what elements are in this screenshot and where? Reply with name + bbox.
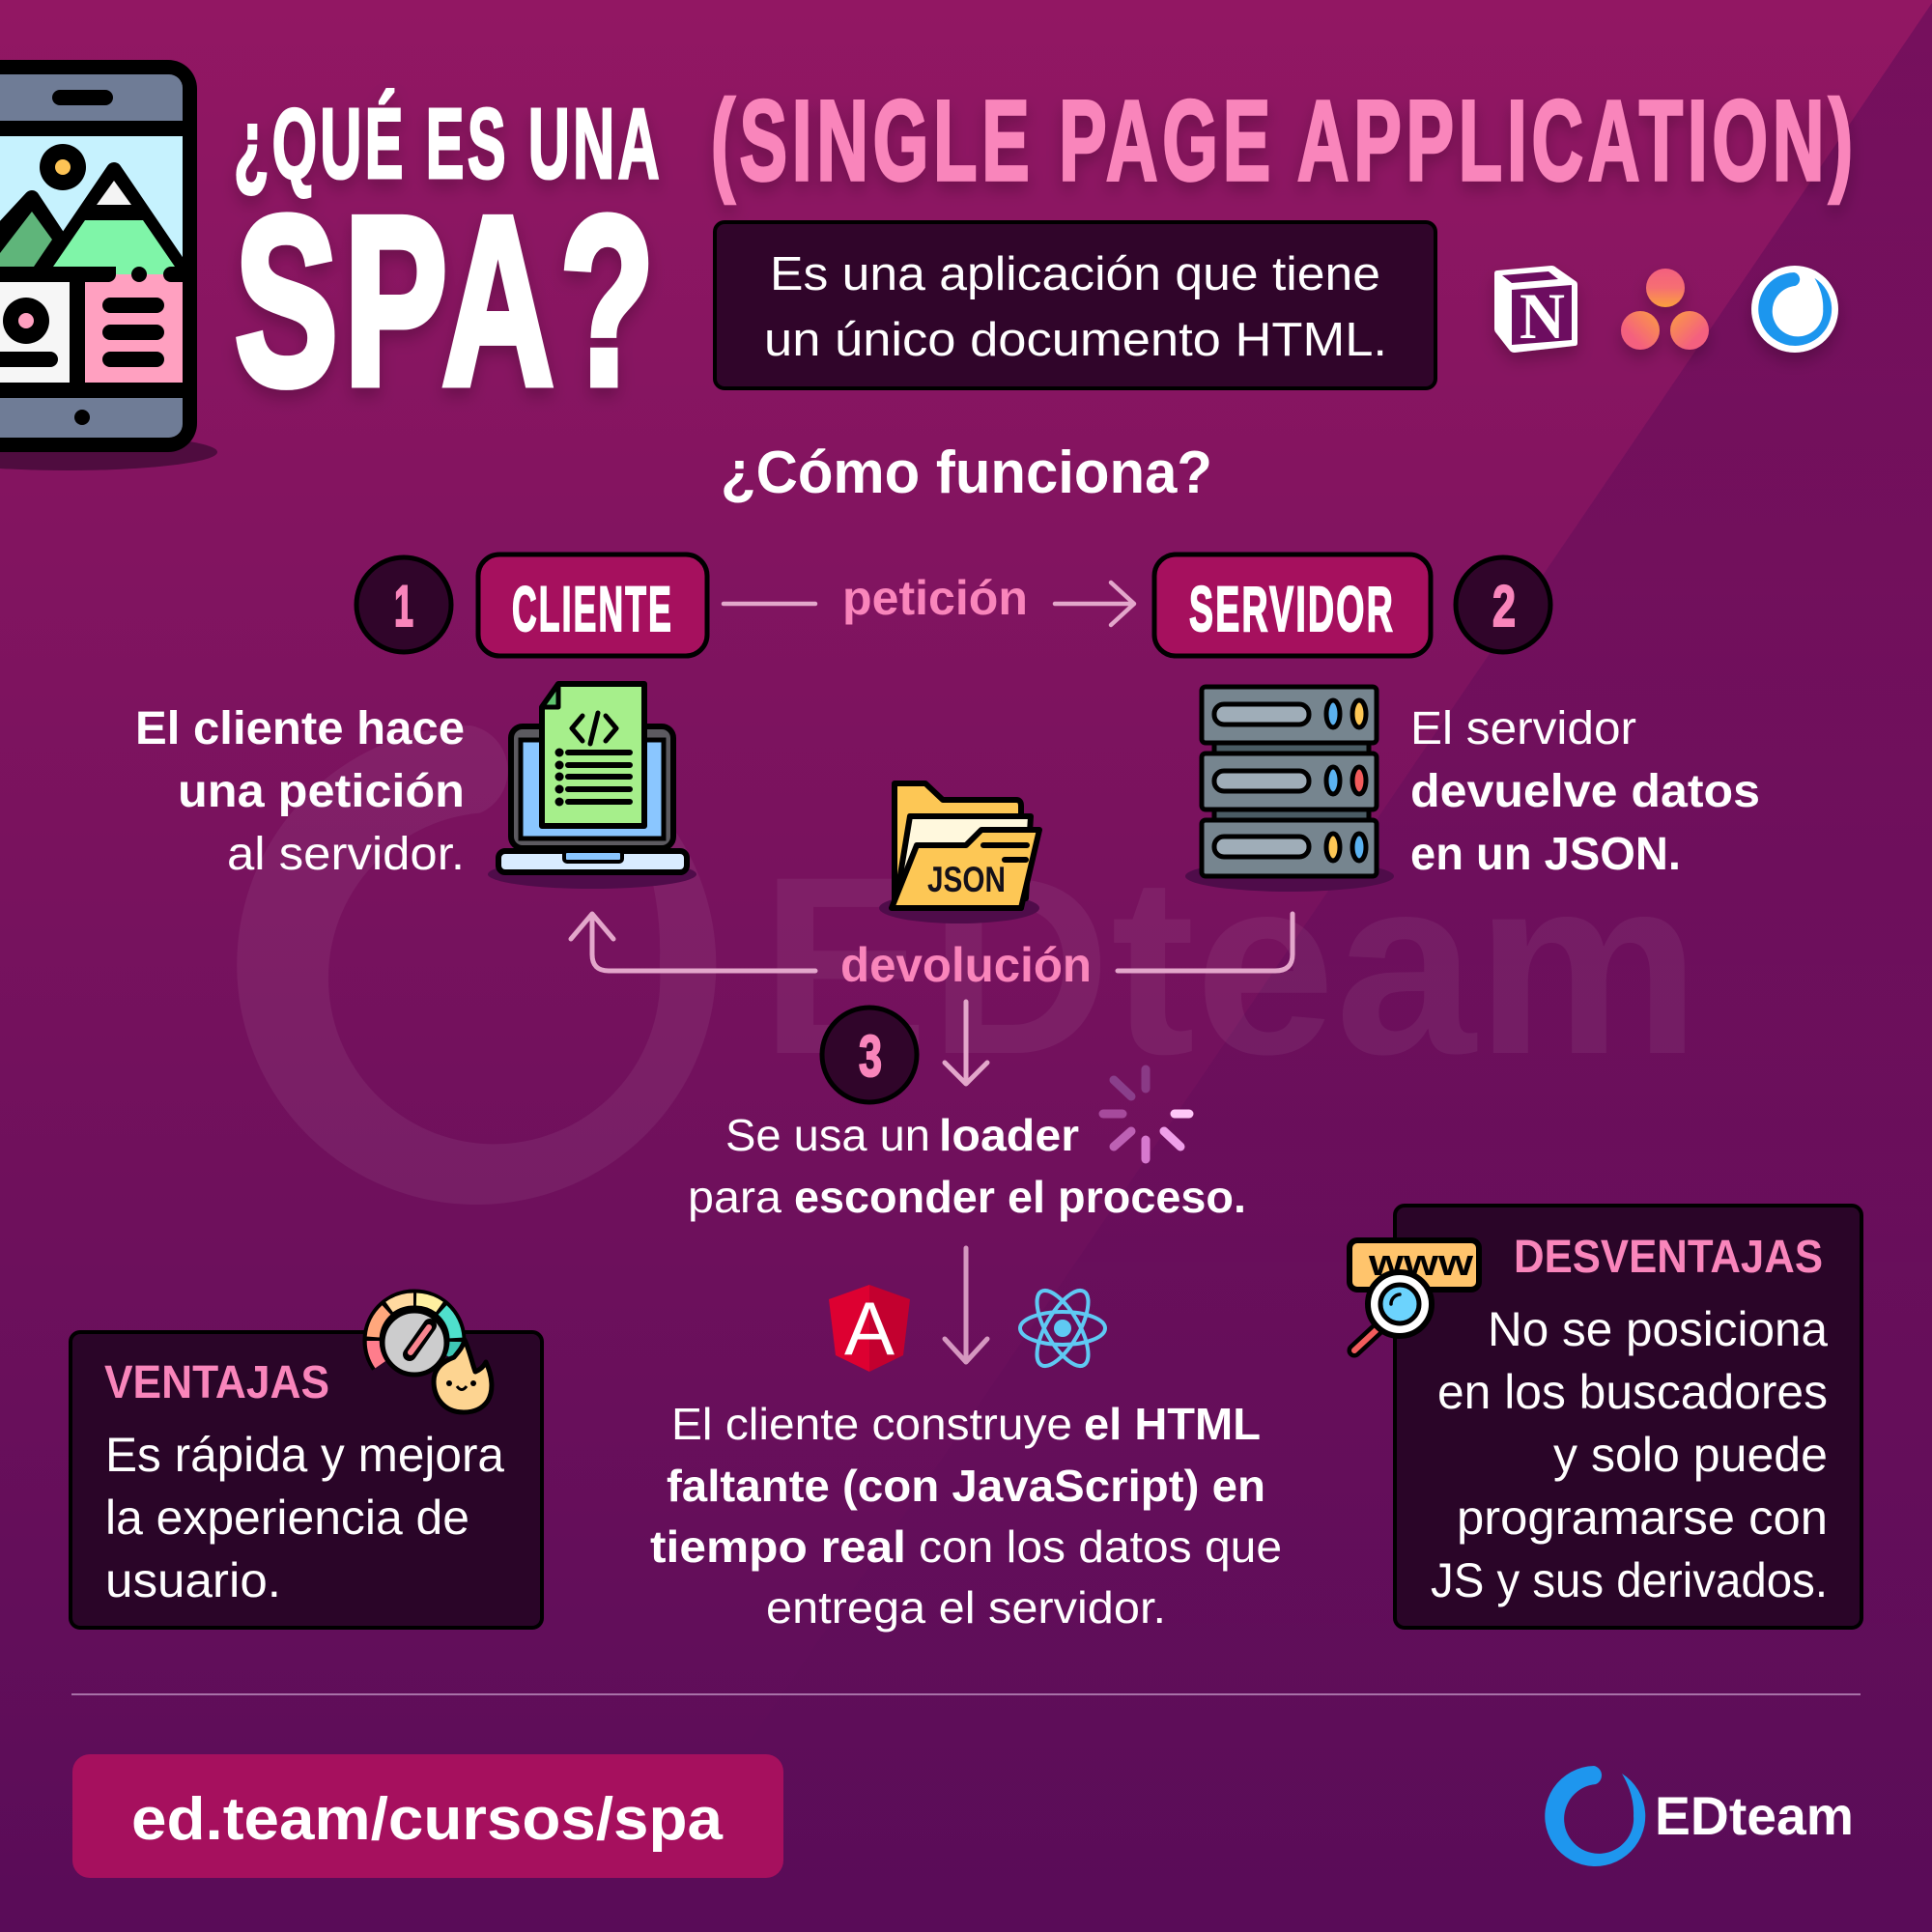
- arrow: down to loader: [945, 1002, 987, 1084]
- icon: server rack: [1185, 687, 1394, 892]
- button: URL: ed.team/cursos/spa: [131, 1786, 724, 1853]
- icon: JSON folder: JSON: [927, 860, 1006, 899]
- text: ventajas: Es rápida y mejora: [105, 1428, 504, 1482]
- box: CLIENTE: CLIENTE: [512, 573, 673, 644]
- text: construcción del HTML: con los datos que: [919, 1521, 1282, 1572]
- button: URL: [72, 1754, 783, 1878]
- arrow: devolución left: [571, 914, 815, 971]
- text: desventajas: en los buscadores: [1437, 1365, 1828, 1419]
- title: ¿Qué es una: ¿QUÉ ES UNA: [234, 88, 663, 199]
- icon: Notion: [1494, 266, 1577, 353]
- panel: desventajas: [1395, 1206, 1861, 1628]
- heading: desventajas: DESVENTAJAS: [1514, 1232, 1823, 1283]
- heading: Cómo funciona: ¿Cómo funciona?: [721, 440, 1212, 506]
- text: servidor: El servidor: [1410, 703, 1636, 754]
- text: construcción del HTML: el HTML: [1084, 1399, 1261, 1449]
- divider: [71, 1693, 1861, 1695]
- icon: Asana: [1621, 269, 1709, 350]
- icon: loader: [1103, 1069, 1189, 1159]
- text: loader: Se usa un: [725, 1110, 930, 1160]
- text: desventajas: No se posiciona: [1488, 1302, 1828, 1356]
- icon: laptop with code: [488, 684, 696, 889]
- text: loader: [688, 1110, 1246, 1222]
- title: SPA?: SPA?: [235, 166, 661, 435]
- panel: definition: Es una aplicación que tiene: [770, 248, 1380, 300]
- text: construcción del HTML: [650, 1399, 1282, 1633]
- text: desventajas: y solo puede: [1553, 1428, 1828, 1482]
- panel: ventajas: [71, 1332, 542, 1628]
- text: servidor: en un JSON.: [1410, 829, 1681, 880]
- text: ventajas: [105, 1428, 504, 1607]
- text: construcción del HTML: entrega el servidor.: [766, 1582, 1166, 1633]
- arrow: petición head: [1055, 582, 1134, 625]
- text: construcción del HTML: El cliente construye: [671, 1399, 1072, 1449]
- arrow: petición line: [724, 602, 815, 606]
- watermark: EDteam logo: [237, 725, 1700, 1205]
- text: construcción del HTML: tiempo real: [650, 1521, 906, 1572]
- badge: 1: [356, 557, 451, 652]
- text: loader: loader: [939, 1110, 1079, 1160]
- icon: phone: [0, 60, 217, 470]
- text: cliente: El cliente hace: [135, 703, 465, 754]
- heading: ventajas: VENTAJAS: [104, 1357, 329, 1408]
- badge: 3: [822, 1008, 917, 1102]
- icon: Angular: [829, 1285, 910, 1372]
- text: loader: esconder el proceso.: [794, 1172, 1246, 1222]
- icon: EDteam logo white: [1751, 266, 1838, 353]
- text: construcción del HTML: faltante (con JavaScript) en: [667, 1461, 1265, 1511]
- badge: 2: [1456, 557, 1550, 652]
- logo: EDteam: [1545, 1766, 1854, 1866]
- badge: 1: 1: [394, 574, 413, 639]
- icon: www search: www: [1368, 1243, 1474, 1284]
- badge: 2: 2: [1492, 574, 1516, 639]
- text: cliente: una petición: [178, 766, 465, 817]
- icon: Angular: A: [844, 1286, 895, 1371]
- badge: 3: 3: [859, 1024, 882, 1089]
- text: servidor: devuelve datos: [1410, 766, 1760, 817]
- text: cliente: al servidor.: [227, 829, 465, 880]
- box: SERVIDOR: [1154, 554, 1431, 656]
- icon: React: [1020, 1283, 1105, 1374]
- watermark: EDteam logo: EDteam: [760, 824, 1700, 1107]
- text: ventajas: usuario.: [105, 1553, 281, 1607]
- logo: EDteam: EDteam: [1655, 1785, 1854, 1846]
- text: ventajas: la experiencia de: [105, 1491, 469, 1545]
- text: servidor: [1410, 703, 1760, 880]
- icon: speedometer and flame: [373, 1299, 492, 1412]
- box: CLIENTE: [478, 554, 707, 656]
- panel: definition: [715, 222, 1435, 388]
- icon: www search: [1350, 1240, 1479, 1350]
- arrow: down to frameworks: [945, 1248, 987, 1362]
- arrow: devolución right: [1118, 914, 1293, 971]
- label: petición: petición: [842, 571, 1028, 625]
- text: desventajas: [1431, 1302, 1828, 1607]
- box: SERVIDOR: SERVIDOR: [1189, 573, 1395, 644]
- text: desventajas: programarse con: [1457, 1491, 1828, 1545]
- text: cliente: [135, 703, 465, 880]
- text: desventajas: JS y sus derivados.: [1431, 1553, 1828, 1607]
- label: devolución: devolución: [840, 938, 1092, 992]
- icon: Notion: N: [1520, 279, 1565, 353]
- text: loader: para: [688, 1172, 781, 1222]
- icon: JSON folder: [879, 783, 1039, 923]
- panel: definition: un único documento HTML.: [764, 314, 1387, 366]
